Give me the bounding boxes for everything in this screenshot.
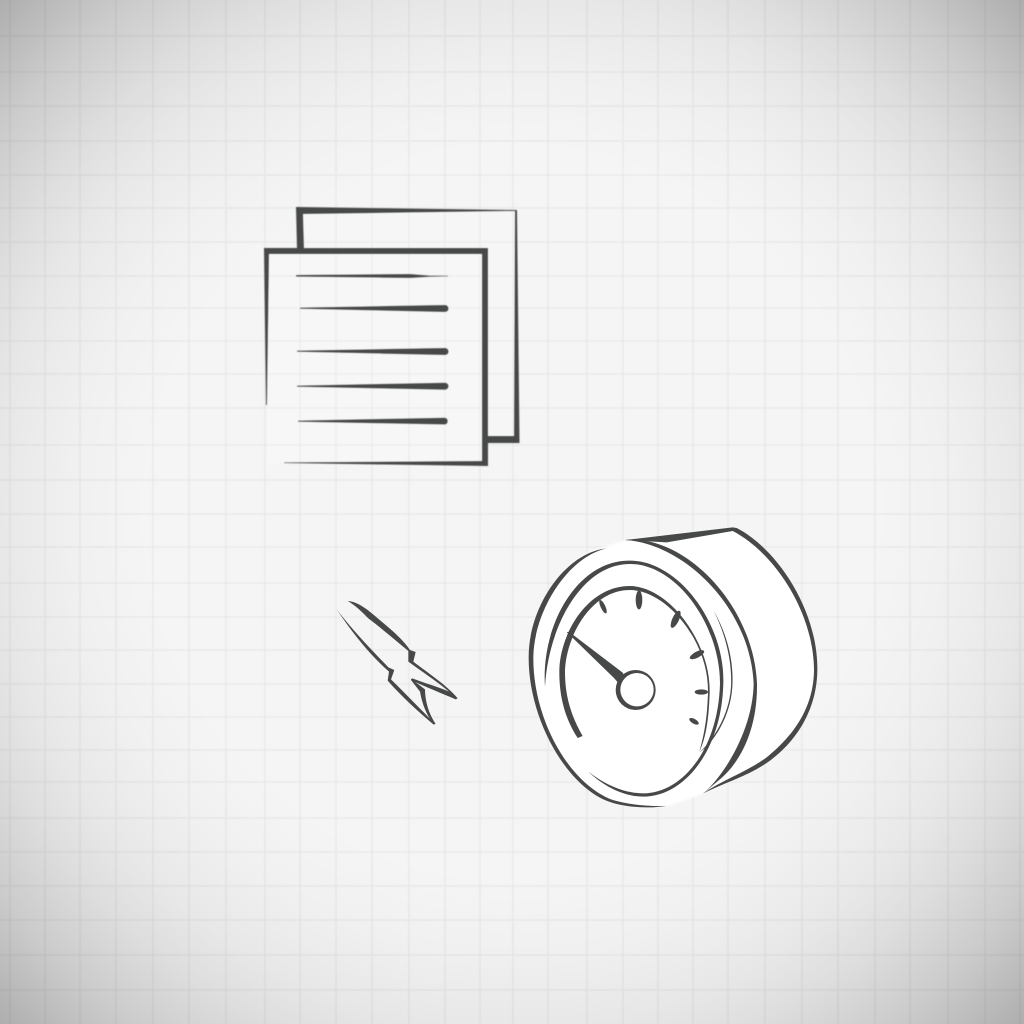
text lines	[296, 274, 448, 424]
gauge thin outer arc	[699, 610, 733, 753]
gauge dial arc	[559, 586, 710, 752]
gauge outer rim	[529, 548, 667, 807]
gauge ticks	[598, 591, 708, 726]
back sheet	[296, 207, 520, 443]
icon: stacked documents	[264, 207, 520, 466]
gauge needle	[567, 632, 625, 683]
gauge housing top and back edge	[625, 527, 817, 794]
front sheet	[264, 248, 488, 466]
gauge inner ring	[545, 561, 723, 797]
icon: pressure gauge	[529, 527, 817, 807]
gauge white body	[529, 528, 816, 807]
gauge housing front edge	[625, 540, 757, 793]
icon: pin	[337, 601, 458, 725]
gauge hub	[616, 670, 656, 710]
